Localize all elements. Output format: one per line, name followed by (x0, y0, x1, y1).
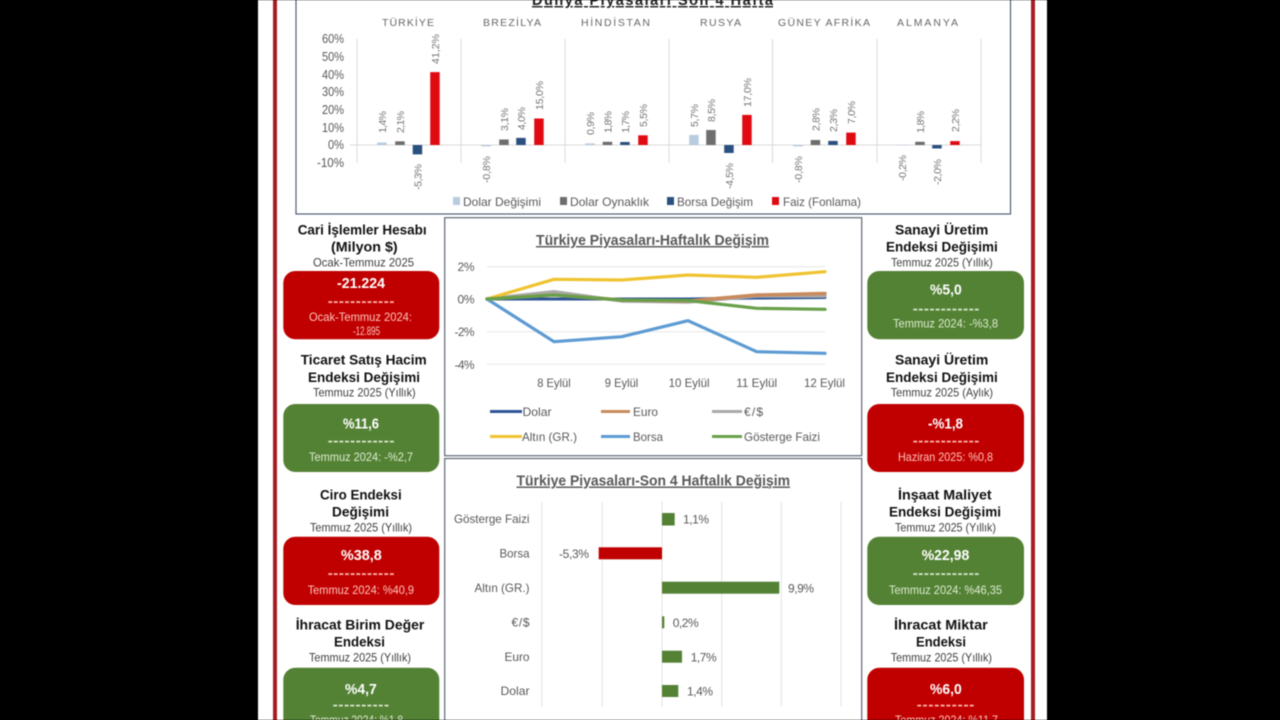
data labels: 2,3% (828, 109, 840, 132)
KPI: export volume: %6,0 (930, 682, 962, 698)
category labels: Dolar (500, 684, 530, 698)
y axis labels: 0% (328, 138, 344, 152)
KPI: construction cost (867, 486, 1024, 605)
legend: weekly chart: Euro (633, 405, 658, 419)
KPI: current account: (Milyon $) (331, 238, 398, 254)
legend: world chart: Dolar Değişimi (463, 195, 541, 209)
category labels (454, 512, 530, 698)
x axis labels: 8 Eylül (537, 376, 571, 390)
KPI: trade sales volume: %11,6 (343, 416, 379, 432)
KPI: turnover index: Ciro Endeksi (320, 486, 402, 502)
legend: weekly chart: Altın (GR.) (522, 430, 577, 444)
KPI: trade sales volume: Temmuz 2025 (Yıllık) (313, 386, 416, 400)
data labels: 4,0% (516, 107, 528, 130)
legend: world chart (453, 195, 861, 209)
heading: weekly change: Türkiye Piyasaları-Haftalık Değişim (536, 233, 769, 249)
legend: world chart: Borsa Değişim (677, 195, 753, 209)
country labels (382, 16, 958, 29)
country labels: BREZİLYA (483, 16, 541, 29)
KPI: current account: Ocak-Temmuz 2024: (309, 310, 412, 324)
category labels: Euro (504, 650, 530, 664)
red frame lines (273, 0, 1035, 720)
KPI: industrial production yearly (867, 222, 1024, 339)
KPI: industrial production yearly: Endeksi Değişimi (886, 238, 998, 254)
y axis labels (454, 260, 475, 372)
KPI: export unit value: Endeksi (334, 634, 385, 650)
country labels: ALMANYA (897, 17, 958, 29)
category labels: Altın (GR.) (474, 581, 530, 595)
data labels: 0,9% (585, 112, 597, 135)
KPI: trade sales volume (283, 352, 439, 472)
KPI: turnover index: %38,8 (341, 548, 382, 564)
KPI: construction cost: %22,98 (922, 548, 969, 564)
data labels: 1,8% (602, 111, 614, 133)
heading: last 4 weeks: Türkiye Piyasaları-Son 4 Haftalık Değişim (516, 474, 790, 490)
data labels: 7,0% (846, 101, 858, 124)
data labels: -2,0% (932, 159, 944, 185)
panel: Türkiye last 4 weeks bar chart (445, 458, 862, 720)
y axis labels: -2% (454, 325, 475, 339)
KPI: industrial production monthly: ------------ (913, 433, 979, 450)
legend: weekly chart: Dolar (522, 405, 552, 419)
data labels: 1,4% (377, 111, 389, 133)
KPI: industrial production yearly: Sanayi Üretim (895, 222, 988, 238)
KPI: trade sales volume: Endeksi Değişimi (308, 369, 420, 385)
KPI: construction cost: İnşaat Maliyet (898, 486, 992, 502)
data labels: 8,5% (706, 99, 718, 122)
KPI: industrial production monthly (867, 352, 1024, 472)
data labels (377, 34, 962, 190)
KPI: industrial production monthly: Haziran 2025: %0,8 (898, 450, 993, 464)
y axis labels: 30% (322, 85, 344, 99)
value labels: -5,3% (559, 547, 589, 561)
data labels: 5,7% (689, 104, 701, 127)
KPI: industrial production yearly: %5,0 (930, 282, 962, 298)
data labels: -0,8% (793, 156, 805, 183)
bars: Almanya (897, 141, 960, 148)
panel: world markets, last 4 weeks (296, 0, 1010, 214)
KPI: export unit value: İhracat Birim Değer (296, 616, 425, 632)
KPI: turnover index: Temmuz 2024: %40,9 (308, 583, 414, 597)
bars: Güney Afrika (793, 133, 856, 146)
KPI: turnover index: Temmuz 2025 (Yıllık) (310, 521, 412, 535)
bars: Türkiye (377, 72, 440, 154)
legend: weekly chart: €/$ (744, 405, 763, 419)
value labels: 9,9% (788, 582, 814, 596)
x axis labels: 9 Eylül (605, 376, 638, 390)
bars (599, 513, 779, 697)
legend: weekly chart: Borsa (633, 430, 663, 444)
y axis labels: 0% (458, 292, 475, 306)
value labels: 1,1% (683, 512, 709, 526)
KPI: trade sales volume: Temmuz 2024: -%2,7 (309, 450, 413, 464)
data labels: 17,0% (742, 78, 754, 107)
KPI: export unit value: %4,7 (345, 682, 377, 698)
data labels: 1,7% (620, 111, 632, 133)
bars: Brezilya (481, 118, 544, 146)
category labels: Gösterge Faizi (454, 512, 530, 526)
KPI: current account (283, 222, 439, 339)
panel: Türkiye weekly change line chart (445, 218, 862, 456)
data labels: 1,8% (915, 111, 927, 133)
y axis labels: -10% (317, 156, 344, 170)
value labels: 1,4% (687, 684, 713, 698)
value labels (559, 512, 814, 698)
KPI: export volume: ---------- (917, 697, 974, 714)
data labels: 2,2% (950, 109, 962, 132)
KPI: industrial production monthly: Endeksi Değişimi (886, 369, 998, 385)
x axis labels (528, 718, 853, 720)
KPI: export volume: Temmuz 2025 (Yıllık) (891, 651, 992, 665)
y axis labels: 50% (322, 50, 344, 64)
y axis labels: 2% (458, 260, 475, 274)
legend: world chart: Faiz (Fonlama) (783, 195, 861, 209)
country labels: TÜRKİYE (382, 16, 434, 29)
value labels: 1,7% (691, 650, 717, 664)
KPI: industrial production monthly: -%1,8 (928, 416, 963, 432)
KPI: construction cost: ------------ (913, 565, 979, 582)
y axis labels: 20% (322, 103, 344, 117)
KPI: construction cost: Temmuz 2025 (Yıllık) (895, 521, 996, 535)
category labels: €/$ (512, 616, 530, 630)
data labels: -4,5% (724, 163, 736, 189)
KPI: export unit value (283, 616, 439, 720)
KPI: construction cost: Temmuz 2024: %46,35 (889, 583, 1002, 597)
white page sheet (258, 0, 1047, 720)
country labels: GÜNEY AFRİKA (778, 16, 870, 29)
KPI: current account: -21.224 (337, 276, 385, 292)
KPI: turnover index: Değişimi (332, 504, 389, 520)
KPI: industrial production yearly: Temmuz 2024: -%3,8 (893, 317, 998, 331)
x axis labels (537, 376, 845, 390)
legend: weekly chart (490, 405, 820, 444)
KPI: industrial production monthly: Sanayi Üretim (895, 352, 988, 368)
y axis labels (317, 32, 344, 170)
KPI: industrial production yearly: ------------ (913, 300, 979, 317)
bars: Rusya (689, 115, 752, 153)
KPI: export volume (867, 616, 1024, 720)
KPI: industrial production yearly: Temmuz 2025 (Yıllık) (891, 256, 993, 270)
data labels: 2,1% (395, 111, 407, 133)
KPI: industrial production monthly: Temmuz 2025 (Aylık) (891, 386, 993, 400)
y axis labels: 10% (322, 121, 344, 135)
country labels: RUSYA (700, 17, 741, 29)
data labels: -0,8% (481, 156, 493, 183)
y axis labels: 60% (322, 32, 344, 46)
KPI: trade sales volume: ------------ (328, 433, 394, 450)
category labels: Borsa (500, 546, 530, 560)
data labels: 2,8% (810, 108, 822, 131)
KPI: export unit value: ---------- (333, 697, 389, 714)
KPI: construction cost: Endeksi Değişimi (889, 504, 1001, 520)
KPI: turnover index: ------------ (328, 565, 394, 582)
y axis labels: -4% (454, 358, 475, 372)
data labels: 3,1% (499, 108, 511, 131)
legend: weekly chart: Gösterge Faizi (744, 430, 820, 444)
bar chart: country changes (377, 72, 960, 154)
x axis labels: 11 Eylül (736, 376, 777, 390)
value labels: 0,2% (673, 616, 699, 630)
bars: Hindistan (585, 135, 648, 145)
KPI: export volume: Endeksi (916, 634, 966, 650)
line chart: six series (487, 272, 825, 353)
data labels: -0,2% (897, 155, 909, 181)
y axis labels: 40% (322, 68, 344, 82)
KPI: current account: ------------ (328, 293, 394, 310)
legend: world chart: Dolar Oynaklık (570, 195, 650, 209)
KPI: trade sales volume: Ticaret Satış Hacim (301, 352, 427, 368)
data labels: 41,2% (430, 34, 442, 64)
KPI: current account: -12.895 (353, 324, 380, 338)
KPI: current account: Ocak-Temmuz 2025 (313, 256, 414, 270)
data labels: -5,3% (412, 164, 424, 190)
KPI: current account: Cari İşlemler Hesabı (298, 222, 427, 238)
data labels: 5,5% (638, 104, 650, 127)
KPI: turnover index (283, 486, 439, 605)
x axis labels: 10 Eylül (669, 376, 710, 390)
data labels: 15,0% (534, 81, 546, 110)
x axis labels: 12 Eylül (804, 376, 845, 390)
KPI: export volume: İhracat Miktar (894, 616, 988, 632)
country labels: HİNDİSTAN (581, 16, 650, 29)
KPI: export unit value: Temmuz 2025 (Yıllık) (309, 651, 411, 665)
